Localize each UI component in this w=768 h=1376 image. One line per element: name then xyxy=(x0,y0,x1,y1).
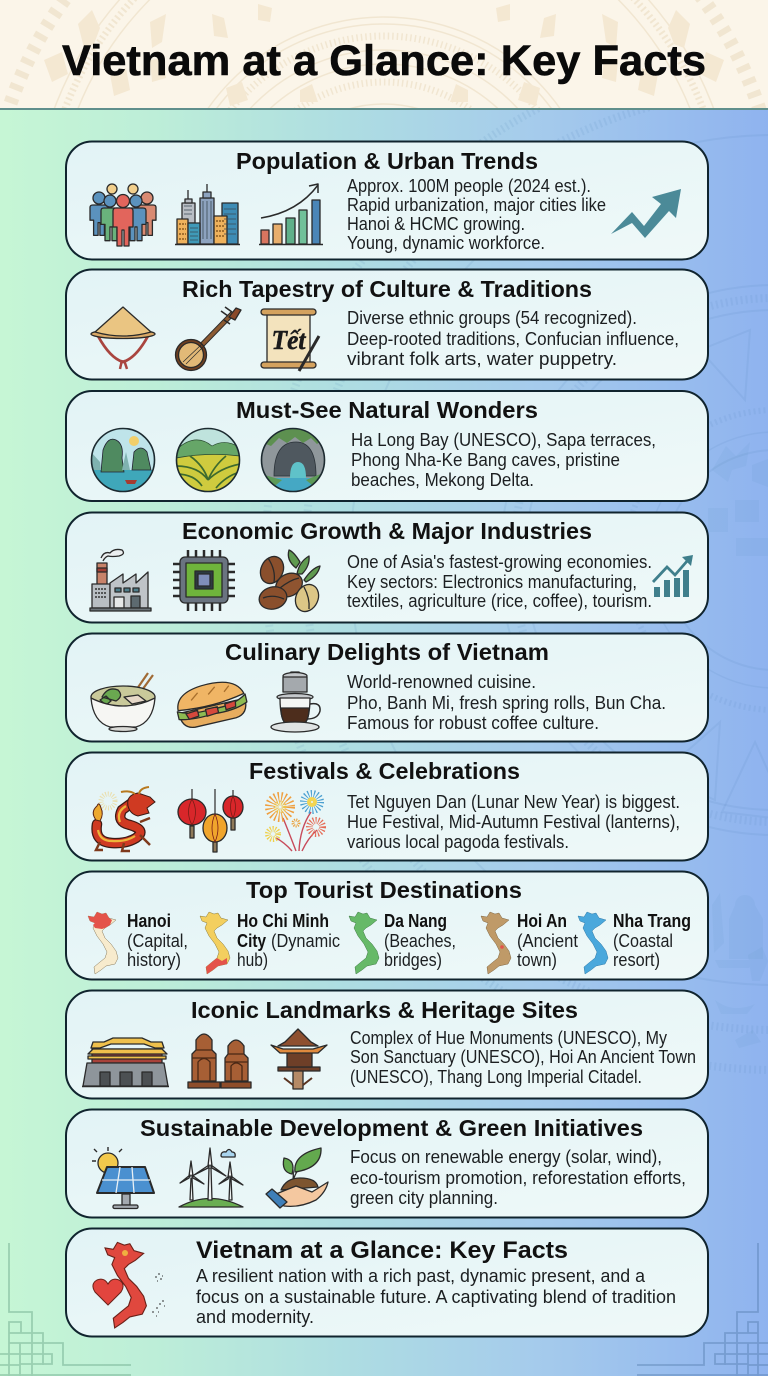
icon: trend arrow xyxy=(611,189,681,238)
heading: landmarks: Iconic Landmarks & Heritage Sites xyxy=(191,997,578,1023)
icon: group of people xyxy=(90,184,156,246)
text: economy facts: textiles, agriculture (rice, coffee), tourism. xyxy=(347,590,652,611)
icon: seedling in hand xyxy=(266,1148,328,1208)
icon: Ha Long Bay xyxy=(91,428,155,494)
panel: culture and traditions xyxy=(66,270,708,380)
heading: natural wonders: Must-See Natural Wonders xyxy=(236,397,538,423)
destination: Da Nang xyxy=(349,910,456,974)
icon: wind turbines xyxy=(179,1148,243,1207)
text: culture facts: Deep-rooted traditions, Confucian influence, xyxy=(347,328,679,349)
panel: culinary delights xyxy=(66,634,708,742)
destination: Ho Chi Minh City: hub) xyxy=(237,949,268,970)
destination: Hoi An: town) xyxy=(517,949,557,970)
text: population facts: Hanoi & HCMC growing. xyxy=(347,213,525,234)
panel: top tourist destinations xyxy=(66,872,708,980)
destination: Da Nang: bridges) xyxy=(384,949,442,970)
title: Vietnam at a Glance: Key Facts xyxy=(62,37,706,85)
text: population facts: Approx. 100M people (2024 est.). xyxy=(347,175,591,196)
title banner xyxy=(0,0,768,110)
text: festival facts: various local pagoda festivals. xyxy=(347,831,569,852)
heading: culture: Rich Tapestry of Culture & Traditions xyxy=(182,276,592,302)
destination: Hoi An: Hoi An xyxy=(517,910,567,931)
icon: conical hat xyxy=(91,307,155,369)
text: economy facts: One of Asia's fastest-growing economies. xyxy=(347,551,652,572)
destination: Ho Chi Minh City: City xyxy=(237,930,267,951)
panel: economy and industries xyxy=(66,512,708,622)
icon: dan nguyet lute xyxy=(176,307,241,370)
icon: pho bowl xyxy=(91,673,155,732)
icon: hanging lanterns xyxy=(178,789,243,852)
panel: landmarks and heritage xyxy=(66,990,708,1098)
destination: Hoi An: (Ancient xyxy=(517,930,579,951)
destination: Nha Trang xyxy=(578,910,691,974)
panel: population and urban trends xyxy=(66,142,708,260)
text: culinary facts: Famous for robust coffee culture. xyxy=(347,712,599,733)
text: sustainability facts: eco-tourism promotion, reforestation efforts, xyxy=(350,1167,686,1188)
panel: festivals xyxy=(66,752,708,860)
text: population facts: Young, dynamic workforce. xyxy=(347,232,545,253)
icon: Vietnamese drip coffee xyxy=(271,672,320,732)
heading: destinations: Top Tourist Destinations xyxy=(246,877,522,903)
text: festival facts: Tet Nguyen Dan (Lunar New Year) is biggest. xyxy=(347,791,680,812)
icon: dragon xyxy=(93,787,155,851)
text: population facts: Rapid urbanization, major cities like xyxy=(347,194,606,215)
destination: Hoi An xyxy=(481,910,579,974)
text: summary: focus on a sustainable future. A captivating blend of tradition xyxy=(196,1286,676,1307)
icon: bar chart with arrow xyxy=(653,555,693,597)
icon: banh mi xyxy=(173,676,250,730)
text: festival facts: Hue Festival, Mid-Autumn Festival (lanterns), xyxy=(347,811,680,832)
panel: sustainable development xyxy=(66,1110,708,1218)
text: landmark facts xyxy=(350,1027,696,1087)
text: natural wonders facts: Ha Long Bay (UNESCO), Sapa terraces, xyxy=(351,429,656,450)
heading: summary: Vietnam at a Glance: Key Facts xyxy=(196,1237,568,1264)
text: landmark facts: (UNESCO), Thang Long Imperial Citadel. xyxy=(350,1066,642,1087)
destination: Hanoi: Hanoi xyxy=(127,910,171,931)
text: summary: A resilient nation with a rich past, dynamic present, and a xyxy=(196,1265,646,1286)
icon: Sapa rice terraces xyxy=(176,428,240,494)
icon: calligraphy scroll: Tết xyxy=(272,325,307,355)
text: economy facts: Key sectors: Electronics manufacturing, xyxy=(347,571,637,592)
heading: sustainability: Sustainable Development & Green Initiatives xyxy=(140,1115,643,1141)
panel: natural wonders xyxy=(66,391,708,501)
text: culinary facts xyxy=(347,671,666,733)
destination: Hanoi: (Capital, xyxy=(127,930,188,951)
icon: imperial citadel xyxy=(82,1038,169,1086)
text: summary xyxy=(196,1265,676,1327)
heading: culinary: Culinary Delights of Vietnam xyxy=(225,639,549,665)
text: culture facts: Diverse ethnic groups (54 recognized). xyxy=(347,307,637,328)
text: natural wonders facts: Phong Nha-Ke Bang caves, pristine xyxy=(351,449,620,470)
icon: fireworks xyxy=(268,794,322,851)
destination: Ho Chi Minh City: (Dynamic xyxy=(271,930,340,951)
text: natural wonders facts: beaches, Mekong Delta. xyxy=(351,469,534,490)
destination: Da Nang: (Beaches, xyxy=(384,930,456,951)
heading: economy: Economic Growth & Major Industries xyxy=(182,518,592,544)
heading: festivals: Festivals & Celebrations xyxy=(249,758,520,784)
text: landmark facts: Complex of Hue Monuments (UNESCO), My xyxy=(350,1027,668,1048)
destination: Ho Chi Minh City: Ho Chi Minh xyxy=(237,910,329,931)
text: economy facts xyxy=(347,551,652,611)
icon: microchip xyxy=(173,550,235,611)
icon: One Pillar Pagoda xyxy=(271,1029,327,1089)
icon: calligraphy scroll xyxy=(261,309,319,371)
destination: Nha Trang: resort) xyxy=(613,949,660,970)
destination: Da Nang: Da Nang xyxy=(384,910,447,931)
destination: Ho Chi Minh City xyxy=(200,910,340,974)
icon: Vietnam map with heart xyxy=(93,1242,165,1328)
text: sustainability facts xyxy=(350,1146,686,1208)
text: culinary facts: Pho, Banh Mi, fresh spring rolls, Bun Cha. xyxy=(347,692,666,713)
icon: solar panel xyxy=(92,1147,154,1208)
text: sustainability facts: green city planning. xyxy=(350,1187,498,1208)
text: culture facts: vibrant folk arts, water puppetry. xyxy=(347,348,617,369)
panel: closing summary xyxy=(66,1228,708,1336)
text: sustainability facts: Focus on renewable energy (solar, wind), xyxy=(350,1146,662,1167)
heading: population: Population & Urban Trends xyxy=(236,148,538,174)
destination: Hanoi xyxy=(88,910,188,974)
icon: growth chart xyxy=(259,184,323,244)
text: summary: and modernity. xyxy=(196,1306,314,1327)
icon: city skyline xyxy=(175,184,240,244)
icon: My Son towers xyxy=(188,1034,251,1088)
text: natural wonders facts xyxy=(351,429,656,490)
icon: factory xyxy=(90,549,151,611)
text: culture facts xyxy=(347,307,679,369)
text: landmark facts: Son Sanctuary (UNESCO), Hoi An Ancient Town xyxy=(350,1046,696,1067)
text: population facts xyxy=(347,175,606,253)
destination: Nha Trang: (Coastal xyxy=(613,930,673,951)
icon: coffee beans xyxy=(256,550,323,615)
text: culinary facts: World-renowned cuisine. xyxy=(347,671,536,692)
icon: Phong Nha cave xyxy=(261,428,325,494)
text: festival facts xyxy=(347,791,680,852)
destination: Nha Trang: Nha Trang xyxy=(613,910,691,931)
destination: Hanoi: history) xyxy=(127,949,181,970)
